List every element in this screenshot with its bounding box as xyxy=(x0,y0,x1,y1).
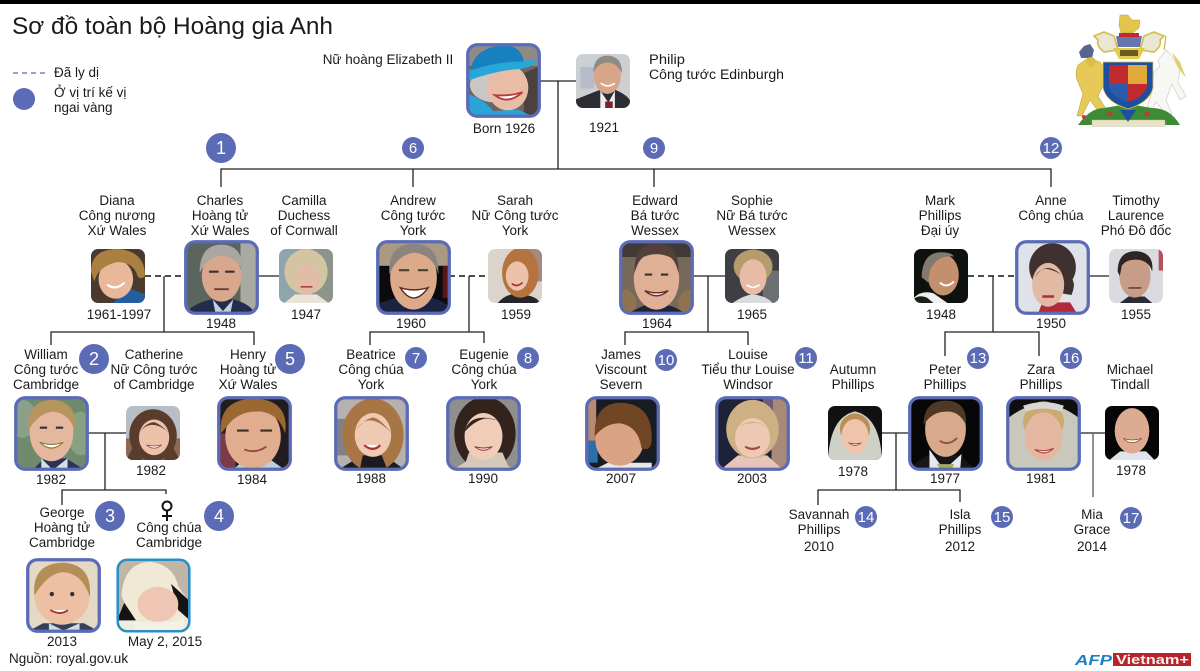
name labels: Nữ Bá tước xyxy=(716,208,788,223)
portrait: Beatrice xyxy=(335,397,408,471)
name labels: Eugenie xyxy=(459,347,509,362)
name labels: Công tước xyxy=(381,208,445,223)
logo: AFP Vietnam+: Vietnam+ xyxy=(1116,652,1190,667)
lion supporter xyxy=(1076,44,1108,116)
name labels: Hoàng tử xyxy=(34,520,90,535)
portrait: Michael Tindall xyxy=(1105,406,1159,460)
portrait: Catherine xyxy=(126,406,180,461)
name labels: 2007 xyxy=(606,471,636,486)
name labels: 1982 xyxy=(36,472,66,487)
name labels: 1978 xyxy=(1116,463,1146,478)
name labels: Xứ Wales xyxy=(191,223,250,238)
name labels: Windsor xyxy=(723,377,773,392)
portrait: Camilla xyxy=(279,249,333,303)
name labels: Peter xyxy=(929,362,962,377)
name labels: Nữ hoàng Elizabeth II xyxy=(323,52,453,67)
name labels: Mark xyxy=(925,193,955,208)
name labels: York xyxy=(502,223,529,238)
name labels: 1988 xyxy=(356,471,386,486)
portrait: William xyxy=(14,396,89,471)
ground and motto xyxy=(1078,104,1180,125)
portrait: Sophie xyxy=(725,249,779,303)
name labels: 1961-1997 xyxy=(87,307,151,322)
succession number badges: 14 xyxy=(858,509,874,526)
title: Sơ đồ toàn bộ Hoàng gia Anh xyxy=(12,13,333,40)
name labels: 1921 xyxy=(589,120,619,135)
name labels: Công chúa xyxy=(1018,208,1084,223)
name labels: Severn xyxy=(600,377,642,392)
portrait: Charles xyxy=(185,241,258,314)
name labels: 1977 xyxy=(930,471,960,486)
name labels: of Cambridge xyxy=(113,377,195,392)
name labels: Catherine xyxy=(125,347,183,362)
name labels: Phillips xyxy=(924,377,967,392)
Philip label: Công tước Edinburgh xyxy=(649,67,784,82)
name labels: Wessex xyxy=(728,223,776,238)
name labels: Công chúa xyxy=(338,362,404,377)
name labels: 1947 xyxy=(291,307,321,322)
portrait: Queen Elizabeth II xyxy=(467,44,540,117)
name labels: Tiểu thư Louise xyxy=(701,362,795,377)
succession number badges: 1 xyxy=(216,138,226,158)
name labels: 1990 xyxy=(468,471,498,486)
name labels: Cambridge xyxy=(29,535,95,550)
icon: royal coat of arms xyxy=(1076,15,1186,126)
Philip label: Philip xyxy=(649,52,685,67)
name labels: York xyxy=(471,377,498,392)
Philip label xyxy=(649,52,784,82)
name labels: Mia xyxy=(1081,507,1103,522)
succession number badges: 6 xyxy=(409,140,417,157)
name labels: Phó Đô đốc xyxy=(1101,223,1172,238)
name labels: Tindall xyxy=(1110,377,1150,392)
name labels: Wessex xyxy=(631,223,679,238)
portrait: Louise xyxy=(716,397,789,470)
icon: female symbol xyxy=(162,502,172,521)
portrait: Diana xyxy=(91,249,145,303)
name labels: Nữ Công tước xyxy=(472,208,559,223)
portrait: Timothy Laurence xyxy=(1109,249,1163,303)
name labels: Savannah xyxy=(789,507,849,522)
shield xyxy=(1103,62,1153,109)
name labels: Công nương xyxy=(79,208,155,223)
name labels: Xứ Wales xyxy=(219,377,278,392)
portrait: Edward xyxy=(620,241,693,314)
name labels: Phillips xyxy=(832,377,875,392)
name labels: York xyxy=(400,223,427,238)
name labels: 1950 xyxy=(1036,316,1066,331)
portrait: Peter xyxy=(909,397,982,470)
name labels: 2012 xyxy=(945,539,975,554)
portrait: Henry xyxy=(218,397,291,470)
portrait: Anne xyxy=(1016,241,1089,314)
name labels: Autumn xyxy=(830,362,876,377)
source: Nguồn: royal.gov.uk xyxy=(9,651,128,666)
name labels: Công chúa xyxy=(451,362,517,377)
name labels: Timothy xyxy=(1112,193,1160,208)
name labels: of Cornwall xyxy=(270,223,338,238)
name labels: Sophie xyxy=(731,193,773,208)
name labels: May 2, 2015 xyxy=(128,634,202,649)
unicorn supporter xyxy=(1146,36,1186,114)
name labels: 1978 xyxy=(838,464,868,479)
name labels: Phillips xyxy=(1020,377,1063,392)
name labels: William xyxy=(24,347,68,362)
top bar xyxy=(0,0,1200,4)
connector lines xyxy=(51,81,1109,505)
succession number badges: 7 xyxy=(412,350,420,367)
succession number badges: 5 xyxy=(285,349,295,369)
portrait: George xyxy=(27,559,100,632)
name labels: 1955 xyxy=(1121,307,1151,322)
name labels: 1984 xyxy=(237,472,268,487)
portrait: Princess of Cambridge xyxy=(117,559,190,632)
succession number badges: 9 xyxy=(650,140,658,157)
name labels: 1965 xyxy=(737,307,767,322)
succession number badges: 8 xyxy=(524,350,532,367)
succession number badges: 10 xyxy=(658,352,674,369)
name labels: Camilla xyxy=(281,193,327,208)
legend: Đã ly dị xyxy=(54,65,99,80)
name labels: Công tước xyxy=(14,362,78,377)
legend: ngai vàng xyxy=(54,100,113,115)
name labels: Hoàng tử xyxy=(220,362,276,377)
mantling and helm xyxy=(1094,32,1164,59)
legend xyxy=(13,65,126,115)
name labels: 1948 xyxy=(206,316,236,331)
portrait: Sarah xyxy=(488,248,542,303)
succession number badges xyxy=(79,133,1142,531)
name labels: 1981 xyxy=(1026,471,1056,486)
name labels: 1959 xyxy=(501,307,531,322)
name labels: Diana xyxy=(99,193,135,208)
name labels: Beatrice xyxy=(346,347,396,362)
name labels: Sarah xyxy=(497,193,533,208)
name labels: York xyxy=(358,377,385,392)
name labels: 2013 xyxy=(47,634,77,649)
name labels: Cambridge xyxy=(13,377,79,392)
name labels: 2003 xyxy=(737,471,767,486)
succession number badges: 2 xyxy=(89,349,99,369)
name labels: Phillips xyxy=(939,522,982,537)
name labels: Isla xyxy=(949,507,971,522)
name labels: Phillips xyxy=(919,208,962,223)
name labels: Michael xyxy=(1107,362,1153,377)
succession number badges: 15 xyxy=(994,509,1010,526)
name labels: Andrew xyxy=(390,193,436,208)
name labels: Phillips xyxy=(798,522,841,537)
name labels: Cambridge xyxy=(136,535,202,550)
portrait: James xyxy=(586,397,659,470)
name labels: Bá tước xyxy=(631,208,680,223)
name labels: Hoàng tử xyxy=(192,208,248,223)
name labels: 2010 xyxy=(804,539,834,554)
name labels: Đại úy xyxy=(921,223,959,238)
name labels: 1960 xyxy=(396,316,426,331)
name labels: Louise xyxy=(728,347,768,362)
legend: Ở vị trí kế vị xyxy=(54,85,126,100)
name labels: Born 1926 xyxy=(473,121,535,136)
name labels: Henry xyxy=(230,347,266,362)
portrait: Zara xyxy=(1007,397,1080,470)
logo: AFP Vietnam+ xyxy=(1074,652,1191,669)
succession number badges: 12 xyxy=(1043,140,1059,157)
portrait: Philip xyxy=(576,54,630,108)
name labels: Zara xyxy=(1027,362,1055,377)
succession number badges: 3 xyxy=(105,506,115,526)
name labels: Edward xyxy=(632,193,678,208)
name labels: Laurence xyxy=(1108,208,1164,223)
name labels: 2014 xyxy=(1077,539,1108,554)
portrait: Mark Phillips xyxy=(914,249,968,303)
name labels: Charles xyxy=(197,193,244,208)
name labels: Nữ Công tước xyxy=(111,362,198,377)
succession number badges: 11 xyxy=(798,350,814,367)
portrait: Autumn xyxy=(828,406,882,460)
name labels: 1948 xyxy=(926,307,956,322)
succession number badges: 17 xyxy=(1123,510,1139,527)
name labels: Công chúa xyxy=(136,520,202,535)
portrait: Andrew xyxy=(377,241,450,314)
name labels: James xyxy=(601,347,641,362)
name labels: Viscount xyxy=(595,362,647,377)
portrait: Eugenie xyxy=(447,397,520,470)
name labels: George xyxy=(39,505,85,520)
name labels: 1964 xyxy=(642,316,673,331)
name labels: Anne xyxy=(1035,193,1067,208)
succession number badges: 4 xyxy=(214,506,224,526)
name labels: Duchess xyxy=(278,208,331,223)
name labels: Xứ Wales xyxy=(88,223,147,238)
name labels: 1982 xyxy=(136,463,166,478)
logo: AFP Vietnam+: AFP xyxy=(1074,652,1113,669)
crest lion xyxy=(1119,15,1140,33)
name labels: Grace xyxy=(1074,522,1110,537)
succession number badges: 13 xyxy=(970,350,986,367)
succession number badges: 16 xyxy=(1063,350,1079,367)
